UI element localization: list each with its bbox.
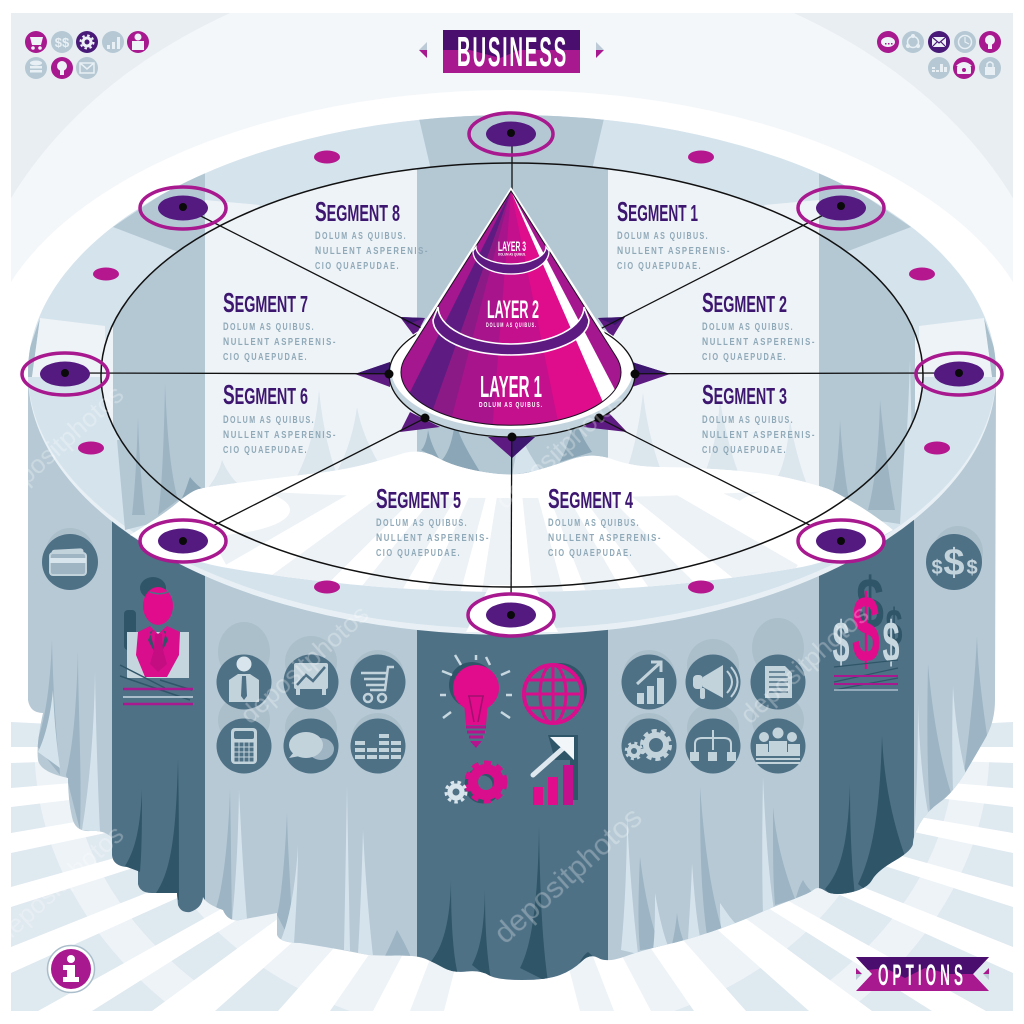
curtain body of the cylinder (20, 370, 1004, 1010)
title banner (443, 28, 580, 75)
inner wall folds (208, 390, 806, 488)
icon: dollars circle (926, 534, 982, 590)
floor rays (11, 722, 1013, 1011)
segment 1 text (617, 196, 731, 272)
inner walls (102, 168, 922, 530)
ring wedges (20, 110, 1004, 377)
segment 2 text: CIO QUAEPUDAE. (702, 352, 787, 363)
icon: growth arrow circle (622, 654, 676, 710)
segment 5 text: SEGMENT 5 (376, 483, 461, 514)
segment 6 text: SEGMENT 6 (223, 379, 308, 410)
icon: gears (446, 763, 505, 802)
segment 2 text: NULLENT ASPERENIS- (702, 336, 816, 348)
small ring dots (78, 150, 950, 594)
icon: equalizer circle (350, 718, 406, 774)
layer band lower (433, 307, 589, 355)
segment 7 text: CIO QUAEPUDAE. (223, 352, 308, 363)
icon: speech bubbles circle (284, 718, 338, 774)
segment 8 text: SEGMENT 8 (315, 196, 400, 227)
icon: people circle (750, 718, 806, 774)
segment 6 text (223, 379, 337, 456)
icon: org chart circle (686, 718, 740, 774)
floor seen through the ring (130, 452, 893, 632)
ghost shadows behind icons (46, 526, 983, 763)
top right icons (877, 31, 1001, 79)
segment 3 text: NULLENT ASPERENIS- (702, 429, 816, 441)
top left icons (25, 31, 149, 79)
curtain folds, light columns (shadow) (36, 636, 988, 964)
segment 5 text: DOLUM AS QUIBUS. (376, 517, 468, 529)
icon: dollars magenta: $ (856, 564, 884, 644)
icon: calculator circle (216, 718, 272, 774)
segment 6 text: CIO QUAEPUDAE. (223, 445, 308, 456)
icon: light bulb (440, 655, 512, 748)
title arrow left (419, 42, 427, 58)
layer 3 label: LAYER 3 (498, 239, 526, 254)
title arrow right (596, 42, 604, 58)
segment 7 text: DOLUM AS QUIBUS. (223, 321, 315, 333)
segment 3 text: CIO QUAEPUDAE. (702, 445, 787, 456)
segment 4 text: DOLUM AS QUIBUS. (548, 517, 640, 529)
info button (48, 946, 94, 992)
ring disk top (20, 110, 1004, 635)
icon: dollars circle: $ (931, 557, 943, 579)
segment 3 text: SEGMENT 3 (702, 379, 787, 410)
layer 3 label (498, 239, 526, 256)
icon: dollars circle: $ (943, 542, 965, 584)
curtain folds, light columns (highlight) (38, 671, 966, 956)
text: BUSINESS (457, 28, 568, 75)
options banner (856, 957, 989, 992)
watermark: depositphotos (488, 801, 649, 950)
connector lines (65, 134, 959, 615)
icon: presentation chart circle (284, 654, 338, 710)
segment 4 text: CIO QUAEPUDAE. (548, 548, 633, 559)
cone base plate (384, 309, 640, 442)
icon: gears circle (622, 718, 676, 774)
watermark: depositphotos (489, 384, 629, 514)
segment 5 text: NULLENT ASPERENIS- (376, 532, 490, 544)
icon: growth chart (533, 735, 578, 805)
curtain folds, dark columns (125, 736, 905, 982)
watermark: depositphotos (234, 599, 374, 729)
icon: dollars magenta: $ (882, 610, 900, 675)
icon: dollars magenta: $ (852, 576, 880, 683)
icon: globe (524, 663, 587, 723)
segment 2 text: DOLUM AS QUIBUS. (702, 321, 794, 333)
segment 6 text: DOLUM AS QUIBUS. (223, 414, 315, 426)
segment 7 text (223, 287, 337, 363)
segment 3 text (702, 379, 816, 456)
star points behind the cone (355, 317, 670, 458)
segment 8 text (315, 196, 429, 272)
icon: dollars magenta: $ (832, 610, 850, 675)
segment 1 text: DOLUM AS QUIBUS. (617, 230, 709, 242)
icon: businessman circle (216, 654, 272, 710)
segment 2 text: SEGMENT 2 (702, 287, 787, 318)
background panel (11, 13, 1013, 282)
icon: shopping cart circle (350, 654, 406, 710)
icon: document circle (750, 654, 806, 710)
dark column: center (417, 630, 608, 980)
dark column: money (819, 520, 914, 894)
target markers (22, 113, 1002, 636)
layer 1 label (479, 369, 543, 409)
segment 4 text: SEGMENT 4 (548, 483, 633, 514)
segment 8 text: NULLENT ASPERENIS- (315, 245, 429, 257)
segment 1 text: CIO QUAEPUDAE. (617, 261, 702, 272)
icon: dollars magenta: $ (886, 599, 903, 657)
outer ellipse line (101, 163, 923, 587)
pyramid cone (400, 187, 622, 426)
segment 8 text: CIO QUAEPUDAE. (315, 261, 400, 272)
layer 3 label: DOLUM AS QUIBUS. (498, 252, 526, 256)
segment 5 text: CIO QUAEPUDAE. (376, 548, 461, 559)
layer band upper (473, 247, 549, 274)
segment 8 text: DOLUM AS QUIBUS. (315, 230, 407, 242)
segment 1 text: NULLENT ASPERENIS- (617, 245, 731, 257)
segment 1 text: SEGMENT 1 (617, 196, 698, 227)
segment 5 text (376, 483, 490, 559)
watermark (0, 379, 874, 950)
segment 2 text (702, 287, 816, 363)
layer 2 label: LAYER 2 (487, 296, 539, 324)
icon: dollars circle: $ (966, 557, 978, 579)
icon: dollars magenta (832, 564, 903, 690)
layer 2 label: DOLUM AS QUIBUS. (486, 322, 537, 329)
layer 2 label (486, 296, 539, 329)
icon: megaphone circle (686, 654, 740, 710)
icon: businessman magenta (120, 577, 193, 704)
layer 1 label: DOLUM AS QUIBUS. (479, 400, 543, 409)
icon: credit card (42, 534, 98, 590)
pyramid cone: LAYER 1 (480, 369, 542, 404)
segment 6 text: NULLENT ASPERENIS- (223, 429, 337, 441)
segment 3 text: DOLUM AS QUIBUS. (702, 414, 794, 426)
watermark: depositphotos (734, 599, 874, 729)
segment 4 text (548, 483, 662, 559)
top left icons: $$ (55, 35, 70, 50)
segment 4 text: NULLENT ASPERENIS- (548, 532, 662, 544)
segment 7 text: NULLENT ASPERENIS- (223, 336, 337, 348)
dark column: person (112, 522, 205, 912)
segment 7 text: SEGMENT 7 (223, 287, 308, 318)
